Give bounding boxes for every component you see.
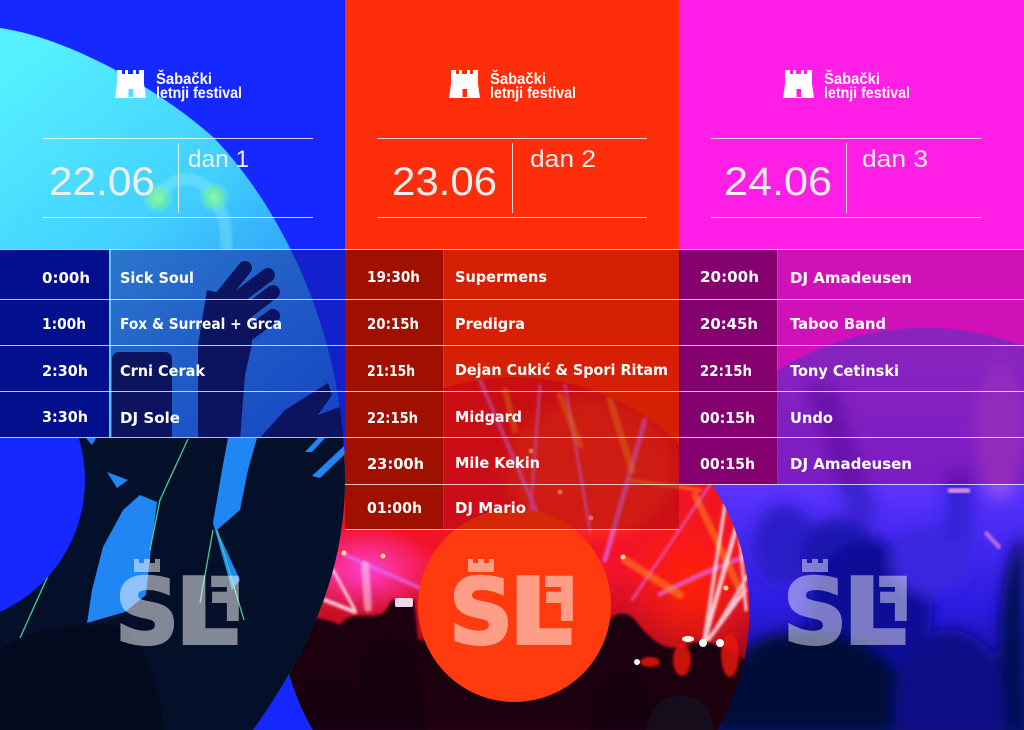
header: day 3: [711, 70, 981, 218]
logo mark: day 2: [449, 559, 576, 665]
day 1 times: 2:30h: [42, 362, 88, 380]
logo mark: day 1: L: [176, 560, 238, 665]
date and day: dan 2: [530, 146, 596, 173]
date and day: 22.06: [49, 160, 155, 204]
day 3 times: 20:00h: [700, 268, 759, 286]
second hand silhouette: [258, 383, 345, 440]
festival name: letnji festival: [824, 85, 910, 102]
day 1 times: [42, 269, 90, 426]
day 2 artists: DJ Mario: [455, 499, 526, 517]
day 2 times: [367, 268, 424, 517]
logo mark: day 3: S: [783, 560, 847, 665]
festival name: Šabački: [824, 70, 880, 88]
schedule: day 2: [345, 249, 679, 529]
day 2 artists: Mile Kekin: [455, 454, 540, 472]
festival name: Šabački: [490, 70, 546, 88]
day 3 artists: Undo: [790, 409, 833, 427]
day 2 times: 01:00h: [367, 499, 422, 517]
phone silhouette: [112, 352, 172, 437]
festival name: letnji festival: [156, 85, 242, 102]
day 3 artists: Taboo Band: [790, 315, 886, 333]
logo mark: day 3: [783, 559, 910, 665]
festival name: [156, 70, 242, 102]
day 3 artists: [790, 269, 912, 473]
date and day: dan 3: [862, 146, 928, 173]
day 2 artists: Supermens: [455, 268, 547, 286]
day 1 artists: Sick Soul: [120, 269, 194, 287]
day 1 artists: Crni Cerak: [120, 362, 206, 380]
icon: castle: [449, 70, 480, 98]
day 3 times: [700, 268, 759, 473]
icon: castle: [115, 70, 146, 98]
day 3 artists: Tony Cetinski: [790, 362, 899, 380]
logo mark: day 3: L: [844, 560, 906, 665]
date and day: [43, 138, 313, 218]
date and day: [711, 138, 981, 218]
logo mark: day 1: F: [208, 566, 242, 634]
crowd silhouette: [280, 600, 752, 730]
day 3 times: 00:15h: [700, 455, 755, 473]
light background gaps: [86, 438, 345, 623]
day 1 artists: [120, 269, 282, 427]
day 3 artists: DJ Amadeusen: [790, 269, 912, 287]
day 2 times: 20:15h: [367, 315, 419, 333]
date and day: 23.06: [392, 160, 497, 204]
photo: concert stage lights, day 2: [280, 375, 760, 730]
day 3 artists: DJ Amadeusen: [790, 455, 912, 473]
logo mark: day 1: [115, 559, 242, 665]
date and day: [377, 138, 647, 218]
header: day 1: [43, 70, 313, 218]
logo mark: day 2: L: [510, 560, 572, 665]
day 2 artists: Midgard: [455, 408, 522, 426]
green rim lights: [20, 439, 244, 638]
date and day: 24.06: [724, 160, 832, 204]
day 2 times: 19:30h: [367, 268, 420, 286]
day 1 times: 0:00h: [42, 269, 90, 287]
day 1 times: 3:30h: [42, 408, 88, 426]
day 1 times: 1:00h: [42, 315, 86, 333]
logo mark: day 1: S: [115, 560, 179, 665]
logo mark: day 2: F: [542, 566, 576, 634]
dark crowd mass: [0, 437, 345, 730]
day 2 times: 22:15h: [367, 409, 418, 427]
day 1 artists: DJ Sole: [120, 409, 180, 427]
day 2 times: 21:15h: [367, 362, 415, 380]
festival name: Šabački: [156, 70, 212, 88]
header: day 2: [377, 70, 647, 218]
festival name: [490, 70, 576, 102]
photo: blurred crowd, day 3: [680, 328, 1024, 730]
icon: castle: [783, 70, 814, 98]
day 3 times: 20:45h: [700, 315, 758, 333]
day 2 artists: Predigra: [455, 315, 525, 333]
day 2 artists: Dejan Cukić & Spori Ritam: [455, 361, 668, 379]
logo mark: day 2: S: [449, 560, 513, 665]
day 2 artists: [455, 268, 668, 517]
day 3 times: 00:15h: [700, 409, 755, 427]
schedule: day 1: [0, 249, 345, 437]
date and day: dan 1: [188, 146, 249, 173]
schedule: day 3: [679, 249, 1024, 484]
blue circle lower left: [0, 348, 85, 612]
arm silhouette: [198, 290, 252, 440]
hand silhouette: [215, 268, 273, 340]
festival name: [824, 70, 910, 102]
orange circle badge: [418, 509, 611, 702]
logo mark: day 3: F: [876, 566, 910, 634]
day 2 times: 23:00h: [367, 455, 424, 473]
day 1 artists: Fox & Surreal + Grca: [120, 315, 282, 333]
stage light blobs: [142, 179, 230, 250]
photo: raised hands, day 1: [0, 0, 345, 730]
day 3 times: 22:15h: [700, 362, 752, 380]
festival name: letnji festival: [490, 85, 576, 102]
